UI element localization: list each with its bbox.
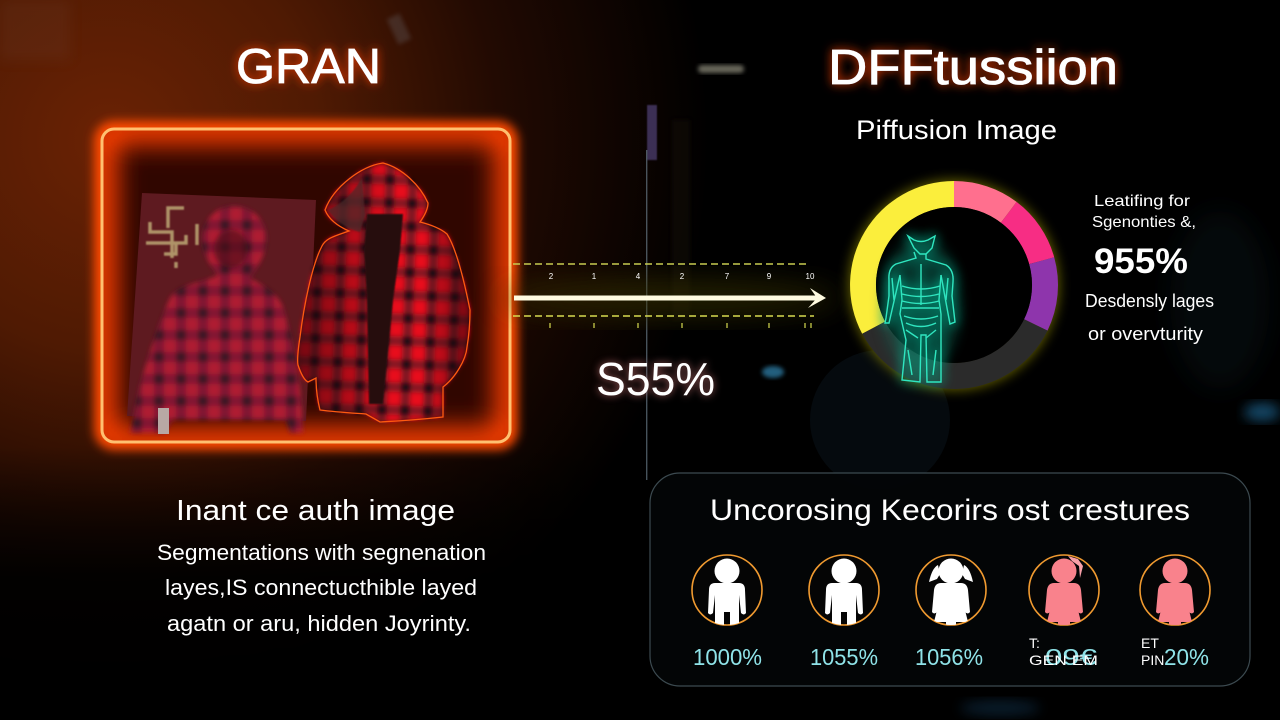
text block: GRAN description: Inant ce auth image xyxy=(176,495,455,527)
donut chart xyxy=(850,181,1058,389)
segment: yellow xyxy=(850,181,954,334)
overlay labels: PIN xyxy=(1141,652,1164,668)
text block: donut annotation: Sgenonties &, xyxy=(1092,214,1196,231)
panel: GRAN jacket image frame xyxy=(102,129,510,442)
scale numbers xyxy=(549,272,815,281)
text block: donut annotation: 955% xyxy=(1094,242,1188,281)
inner shirt xyxy=(364,214,403,404)
percent labels: 1000% xyxy=(693,644,762,670)
segment: purple xyxy=(1024,257,1058,331)
overlay labels: GEN EM xyxy=(1029,652,1098,668)
jacket outline xyxy=(298,163,470,422)
segment: hot pink xyxy=(1001,202,1054,264)
text block: GRAN description: layes,IS connectucthible layed xyxy=(165,575,477,600)
scale numbers: 2 xyxy=(549,272,554,281)
ghost image card xyxy=(127,193,316,434)
panel: population figures xyxy=(650,473,1250,686)
neon border xyxy=(102,129,510,442)
icon: pink figure xyxy=(1140,555,1210,626)
arrow with scale xyxy=(500,264,840,328)
text block: GRAN description: agatn or aru, hidden Joyrinty. xyxy=(167,611,471,636)
icon: person 2 xyxy=(809,555,879,626)
ghost hooded jacket xyxy=(130,206,303,433)
scale numbers: 4 xyxy=(636,272,641,281)
overlay labels xyxy=(1029,635,1164,668)
title: DFFtussiion: DFFtussiion xyxy=(828,41,1118,95)
panel heading: Uncorosing Kecorirs ost crestures xyxy=(710,494,1190,527)
red plaid jacket xyxy=(298,163,470,422)
hood lining edge xyxy=(328,178,365,232)
scale numbers: 2 xyxy=(680,272,685,281)
ghost face shadow xyxy=(214,230,248,268)
overlay labels: ET xyxy=(1141,635,1159,651)
segment: light pink xyxy=(954,181,1017,223)
text block: donut annotation: Leatifing for xyxy=(1094,193,1191,210)
stat: S55%: S55% xyxy=(596,353,715,405)
text block: donut annotation: Desdensly lages xyxy=(1085,291,1214,311)
icon: girl with pigtails xyxy=(916,555,986,626)
text block: donut annotation xyxy=(1085,193,1214,344)
text block: donut annotation: or overvturity xyxy=(1088,324,1203,344)
percent labels: 20% xyxy=(1164,644,1209,670)
title: GRAN: GRAN xyxy=(236,40,381,94)
text block: GRAN description xyxy=(157,495,486,636)
text block: GRAN description: Segmentations with segnenation xyxy=(157,540,486,565)
percent labels: 1056% xyxy=(915,644,983,670)
icon: pink figure with bow xyxy=(1029,555,1099,626)
percent labels: 09€ xyxy=(1045,644,1097,670)
scale numbers: 10 xyxy=(806,272,815,281)
overlay labels: T: xyxy=(1029,635,1040,651)
scale numbers: 9 xyxy=(767,272,772,281)
segment: dark xyxy=(862,319,1048,389)
subtitle: Piffusion Image: Piffusion Image xyxy=(856,115,1057,145)
icon: pipe glyph xyxy=(146,208,197,268)
percent labels: 1055% xyxy=(810,644,878,670)
scale numbers: 7 xyxy=(725,272,730,281)
icon: person 1 xyxy=(692,555,762,626)
jacket shading xyxy=(298,163,470,422)
scale numbers: 1 xyxy=(592,272,597,281)
ghost label tag xyxy=(158,408,169,434)
percent labels xyxy=(693,644,1209,670)
icon: neon body outline xyxy=(885,236,955,382)
